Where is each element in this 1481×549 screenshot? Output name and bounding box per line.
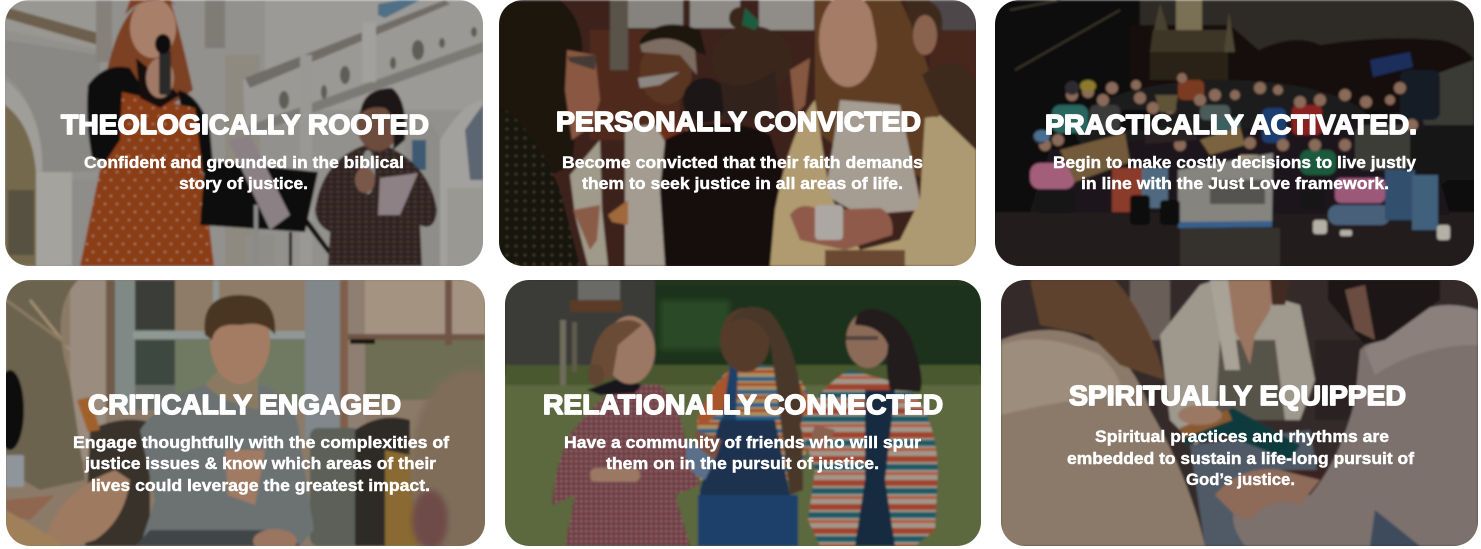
- music stand: [200, 160, 318, 232]
- photo: young man talking on a sofa: [6, 280, 485, 546]
- right woman: [815, 0, 945, 180]
- hands: [1215, 469, 1320, 520]
- description: Begin to make costly decisions to live justly: [1053, 153, 1417, 172]
- description: [84, 153, 404, 193]
- description: [564, 433, 921, 473]
- sofa: [85, 420, 150, 546]
- description: them on in the pursuit of justice.: [606, 454, 879, 473]
- centre woman: [1160, 280, 1315, 445]
- curtain: [6, 280, 85, 490]
- photo: night group with banners: [990, 0, 1480, 270]
- windows: [134, 329, 306, 410]
- wet ground: [995, 212, 1475, 267]
- panel: theologically rooted: [0, 0, 490, 270]
- right woman: [800, 370, 938, 546]
- until all are free banner: [1178, 153, 1273, 227]
- description: [562, 153, 923, 193]
- blurred foreground head: [407, 370, 485, 546]
- description: Confident and grounded in the biblical: [84, 153, 404, 172]
- description: Have a community of friends who will spur: [564, 433, 921, 452]
- panel: personally convicted: [495, 0, 980, 270]
- description: [73, 433, 449, 495]
- left woman: [499, 0, 582, 174]
- description: embedded to sustain a life-long pursuit of: [1067, 449, 1414, 468]
- photo: friends talking with mugs: [495, 0, 980, 270]
- heading: THEOLOGICALLY ROOTED: [61, 109, 429, 140]
- description: [1067, 427, 1414, 489]
- description: Spiritual practices and rhythms are: [1095, 427, 1389, 446]
- heading: CRITICALLY ENGAGED: [88, 389, 401, 420]
- description: God’s justice.: [1186, 470, 1295, 489]
- panel: spiritually equipped: [995, 275, 1481, 549]
- description: Become convicted that their faith demands: [562, 153, 923, 172]
- heading: SPIRITUALLY EQUIPPED: [1069, 380, 1406, 411]
- description: justice issues & know which areas of their: [84, 454, 436, 473]
- panel: practically activated: [990, 0, 1480, 270]
- man: [140, 385, 314, 546]
- crowd: [1075, 80, 1368, 144]
- panel: critically engaged: [6, 280, 485, 546]
- jeans: [1190, 430, 1330, 546]
- panel: relationally connected: [500, 275, 985, 549]
- left knee and mug: [45, 470, 130, 546]
- right man hoodie: [1232, 342, 1478, 546]
- heading: RELATIONALLY CONNECTED: [543, 389, 943, 420]
- description: story of justice.: [179, 174, 308, 193]
- description: Engage thoughtfully with the complexities of: [73, 433, 449, 452]
- description: lives could leverage the greatest impact.: [91, 476, 430, 495]
- book: [1180, 408, 1300, 460]
- left woman: [552, 385, 700, 546]
- left hoodie: [1001, 330, 1205, 546]
- photo: three people with a bible: [995, 275, 1481, 549]
- description: them to seek justice in all areas of life.: [582, 174, 903, 193]
- heading: PRACTICALLY ACTIVATED.: [1045, 109, 1417, 140]
- centre woman: [697, 363, 812, 480]
- centre woman back: [660, 124, 785, 266]
- IJM flag: [1370, 52, 1413, 77]
- headband woman: [625, 125, 700, 266]
- woman two: [315, 145, 437, 266]
- heading: PERSONALLY CONVICTED: [556, 106, 921, 137]
- photo: two speakers in a church: [0, 0, 490, 270]
- protest signs: [1060, 133, 1130, 182]
- woman one: [106, 0, 194, 105]
- photo: three friends walking on grass: [500, 275, 985, 549]
- description: in line with the Just Love framework.: [1081, 174, 1389, 193]
- description: [1053, 153, 1417, 193]
